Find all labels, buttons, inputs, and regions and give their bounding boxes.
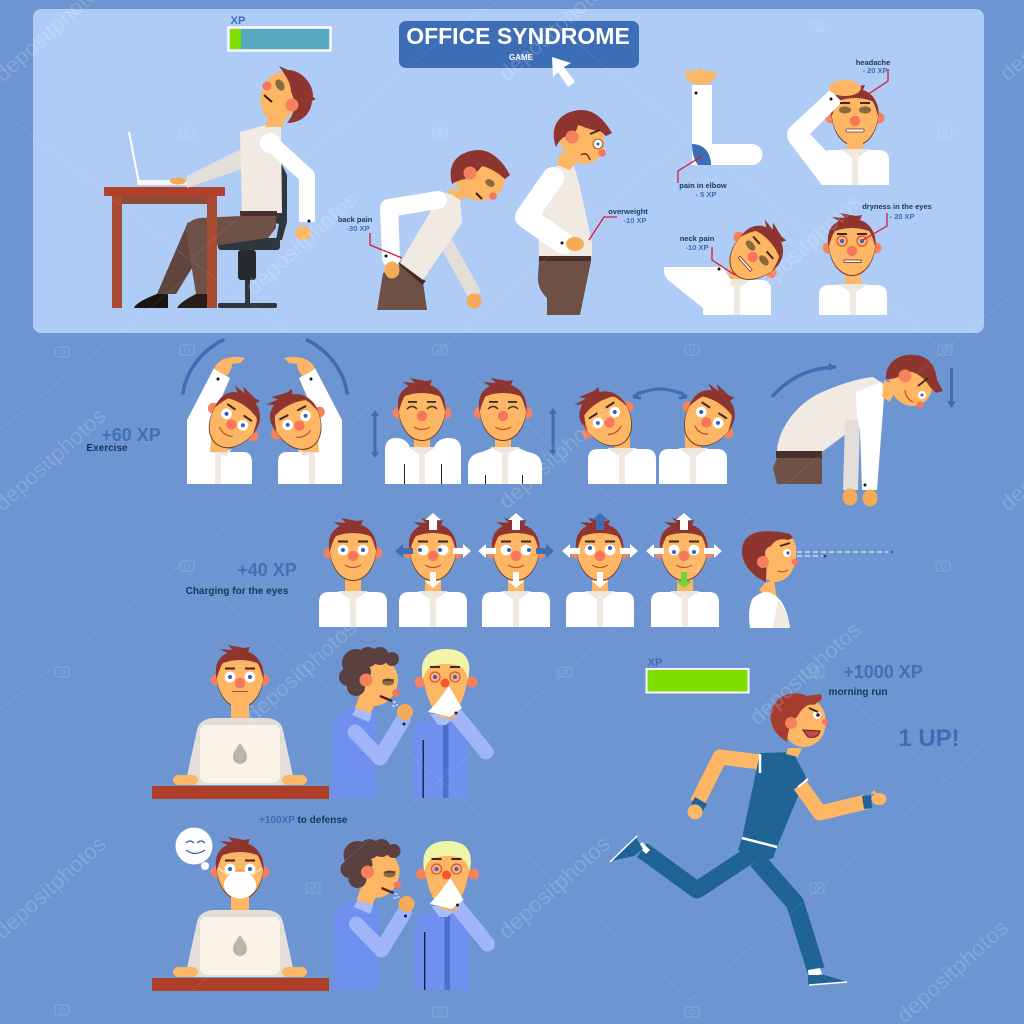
label: headache (856, 58, 890, 95)
figure: headache (787, 80, 889, 185)
figure: man sitting at desk (104, 66, 316, 308)
eye exercise: look up (562, 513, 638, 627)
label: neck pain: neck pain (680, 234, 715, 243)
heading: morning run: +1000 XP (843, 662, 923, 682)
caption: defense: +100XP to defense (259, 815, 348, 826)
sight lines: dashed (797, 551, 893, 557)
eye exercise: side profile looking far (742, 531, 798, 628)
watermark: depositphotos (494, 831, 615, 944)
watermark: depositphotos (241, 615, 362, 728)
scene: man at laptop without mask (152, 645, 329, 799)
eye exercise: front face (319, 518, 387, 627)
label: pain in elbow: - 5 XP (696, 190, 716, 199)
arrow: neck tilt arc (633, 389, 687, 398)
exercise: shoulders lowered (468, 378, 542, 484)
title banner (399, 21, 639, 68)
label: overweight (589, 207, 648, 240)
heading: charging for the eyes: +40 XP (237, 560, 297, 580)
arrow: shoulders up down left (371, 410, 379, 458)
heading: charging for the eyes (186, 560, 297, 597)
label: back pain (338, 215, 402, 258)
top XP bar (228, 15, 330, 50)
label: overweight: -10 XP (624, 216, 646, 225)
scene: sneezing colleague bottom (414, 841, 488, 990)
heading: morning run: morning run (829, 687, 887, 698)
label: dryness in the eyes (862, 202, 932, 240)
scene: man at laptop with mask (152, 837, 329, 991)
exercise: neck tilt right (659, 375, 752, 484)
label: back pain: -30 XP (347, 224, 369, 233)
exercise: forward bend (772, 355, 943, 506)
exercise: side bend left (183, 340, 277, 484)
top XP bar: XP (231, 15, 245, 27)
heading: exercise: Exercise (86, 443, 128, 454)
figure: back pain (377, 150, 510, 310)
figure: overweight (526, 110, 612, 315)
eye exercise: look left (395, 513, 471, 627)
figure: dryness in the eyes (819, 213, 887, 315)
heading: charging for the eyes: Charging for the eyes (186, 586, 289, 597)
scene: sneezing colleague top (413, 649, 486, 798)
label: headache: headache (856, 58, 890, 67)
exercise: side bend right (256, 340, 347, 484)
label: dryness in the eyes: - 20 XP (889, 212, 915, 221)
arrow: bend down (947, 368, 956, 408)
panel: office syndrome problems (33, 9, 984, 333)
eye exercise: look down (646, 513, 722, 627)
exercise: shoulders raised (385, 378, 461, 484)
watermark: depositphotos (745, 617, 866, 730)
title banner: GAME (509, 53, 534, 62)
watermark: depositphotos (494, 401, 615, 514)
label: neck pain (680, 234, 735, 275)
icon: cursor arrow (552, 57, 575, 87)
exercise: neck tilt left (564, 375, 656, 484)
heading: exercise: +60 XP (101, 425, 161, 445)
figure: pain in elbow (685, 67, 762, 165)
watermark: depositphotos (241, 187, 362, 300)
callout: 1 up: 1 UP! (898, 725, 960, 752)
second XP bar: XP (648, 657, 662, 669)
label: pain in elbow: pain in elbow (679, 181, 727, 190)
figure: runner (610, 693, 886, 985)
label: headache: - 20 XP (862, 66, 888, 75)
label: neck pain: -10 XP (686, 243, 708, 252)
label: back pain: back pain (338, 215, 373, 224)
scene: coughing colleague bottom (334, 839, 414, 990)
heading: exercise (86, 425, 161, 454)
heading: morning run (829, 662, 923, 698)
label: overweight: overweight (608, 207, 648, 216)
title banner: OFFICE SYNDROME (406, 23, 630, 49)
arrow: shoulders up down right (549, 408, 557, 456)
icon: thought bubble (176, 828, 212, 870)
label: pain in elbow (678, 156, 727, 199)
watermark: depositphotos (745, 189, 866, 302)
eye exercise: look right (478, 513, 554, 627)
label: dryness in the eyes: dryness in the eyes (862, 202, 932, 211)
second XP bar (646, 657, 748, 692)
figure: neck pain (664, 210, 801, 315)
scene: coughing colleague top (332, 647, 413, 798)
